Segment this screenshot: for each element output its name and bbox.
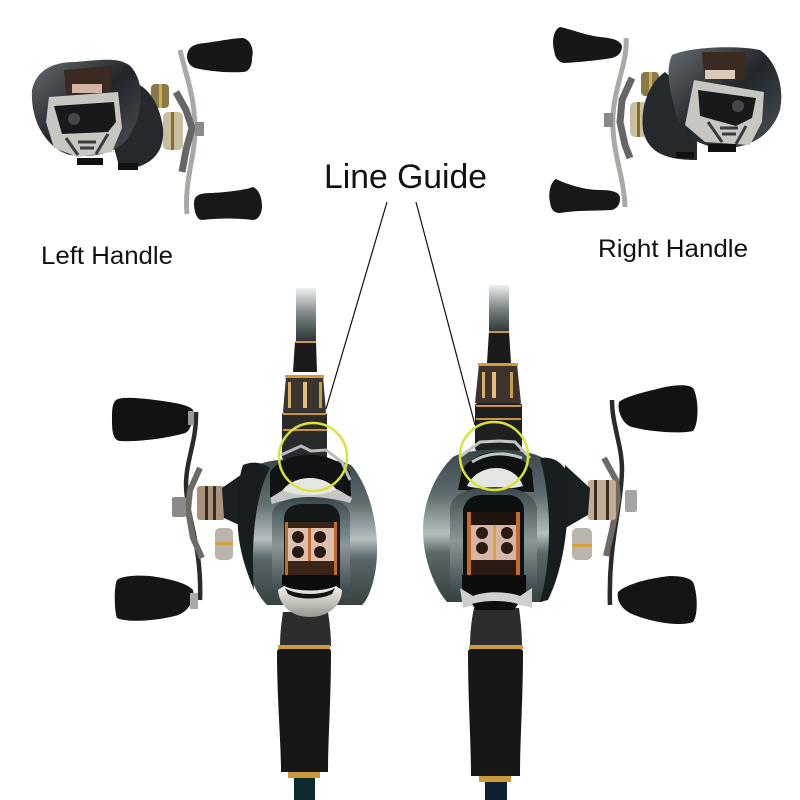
ferrule [293, 341, 317, 372]
label: Right Handle: Right Handle [598, 235, 748, 263]
callout line: right [416, 202, 475, 425]
thumb bar [460, 588, 532, 608]
dark panel [698, 90, 756, 126]
bolt [172, 497, 186, 517]
big reel: left [112, 288, 377, 800]
upper grip [553, 27, 622, 63]
callout circle: left [279, 423, 347, 491]
rubber base [280, 612, 331, 646]
callout circle: right [460, 422, 528, 490]
gear stack [588, 480, 616, 520]
rear gear [641, 72, 659, 96]
front gear [630, 102, 648, 137]
arch band [450, 487, 537, 594]
feet [77, 158, 103, 165]
star drag [604, 458, 618, 556]
gear housing [562, 465, 590, 530]
spool opening [463, 495, 524, 580]
gold ring bottom [479, 776, 511, 782]
big reel: right [423, 285, 698, 800]
rubber base [470, 608, 522, 646]
handle arm [186, 412, 200, 600]
arm [180, 50, 195, 214]
title: Line Guide: Line Guide [324, 158, 487, 196]
body [423, 450, 554, 602]
spool [467, 512, 520, 575]
side plate [540, 458, 568, 602]
thumb bar [278, 586, 342, 617]
vents [66, 134, 108, 155]
arm [613, 38, 626, 207]
callout line: left [326, 202, 387, 409]
black bar [282, 575, 340, 593]
side plate [642, 72, 697, 160]
gold collar [475, 364, 521, 403]
gold ring bottom [288, 772, 320, 778]
chevron strokes [281, 446, 350, 480]
black bar [462, 575, 526, 597]
front gear [163, 112, 183, 150]
foam handle [468, 649, 523, 776]
gold collar [283, 376, 326, 412]
silver frame [46, 92, 122, 157]
dark panel [54, 102, 116, 134]
foam handle [277, 649, 331, 772]
dome highlight [282, 478, 337, 496]
window [64, 66, 112, 96]
spool [285, 522, 337, 575]
body [32, 60, 141, 156]
star drag [176, 92, 192, 172]
body [669, 47, 781, 148]
gear stack [197, 486, 225, 520]
side plate [112, 82, 163, 170]
dome highlight [467, 468, 523, 489]
small reel: left handle [32, 38, 262, 220]
rod bottom [485, 782, 507, 800]
gear housing [222, 472, 250, 530]
ferrule [487, 331, 511, 363]
foot [708, 144, 736, 152]
body [243, 458, 377, 605]
rear gear [151, 84, 169, 108]
bolt [604, 113, 613, 127]
rod bottom [294, 778, 315, 800]
lower grip [618, 576, 697, 624]
gold ring [469, 645, 523, 649]
silver frame [685, 80, 764, 145]
upper grip [112, 398, 193, 441]
side plate [238, 463, 270, 590]
silver band [270, 489, 352, 504]
tension knob [572, 528, 592, 560]
star drag [620, 78, 632, 158]
star drag [188, 468, 202, 558]
label: Left Handle: Left Handle [41, 242, 173, 270]
lower collar [282, 412, 327, 460]
small reel: right handle [549, 27, 781, 213]
chevron strokes [461, 441, 530, 462]
top black mass [458, 452, 534, 492]
gold ring [278, 645, 330, 649]
spool opening [284, 504, 340, 590]
tension knob [215, 528, 233, 560]
window [702, 52, 746, 80]
bolt [625, 490, 637, 512]
bolt [195, 122, 204, 136]
top black mass [270, 455, 351, 500]
handle arm [610, 400, 622, 605]
lower grip [194, 187, 262, 220]
lower grip [115, 576, 193, 621]
lower collar [475, 403, 522, 451]
upper grip [619, 385, 698, 432]
rod top [489, 285, 509, 333]
vents [708, 122, 746, 144]
lower grip [549, 179, 620, 213]
arch band [272, 497, 350, 594]
upper grip [187, 38, 253, 72]
rod top [296, 288, 316, 342]
